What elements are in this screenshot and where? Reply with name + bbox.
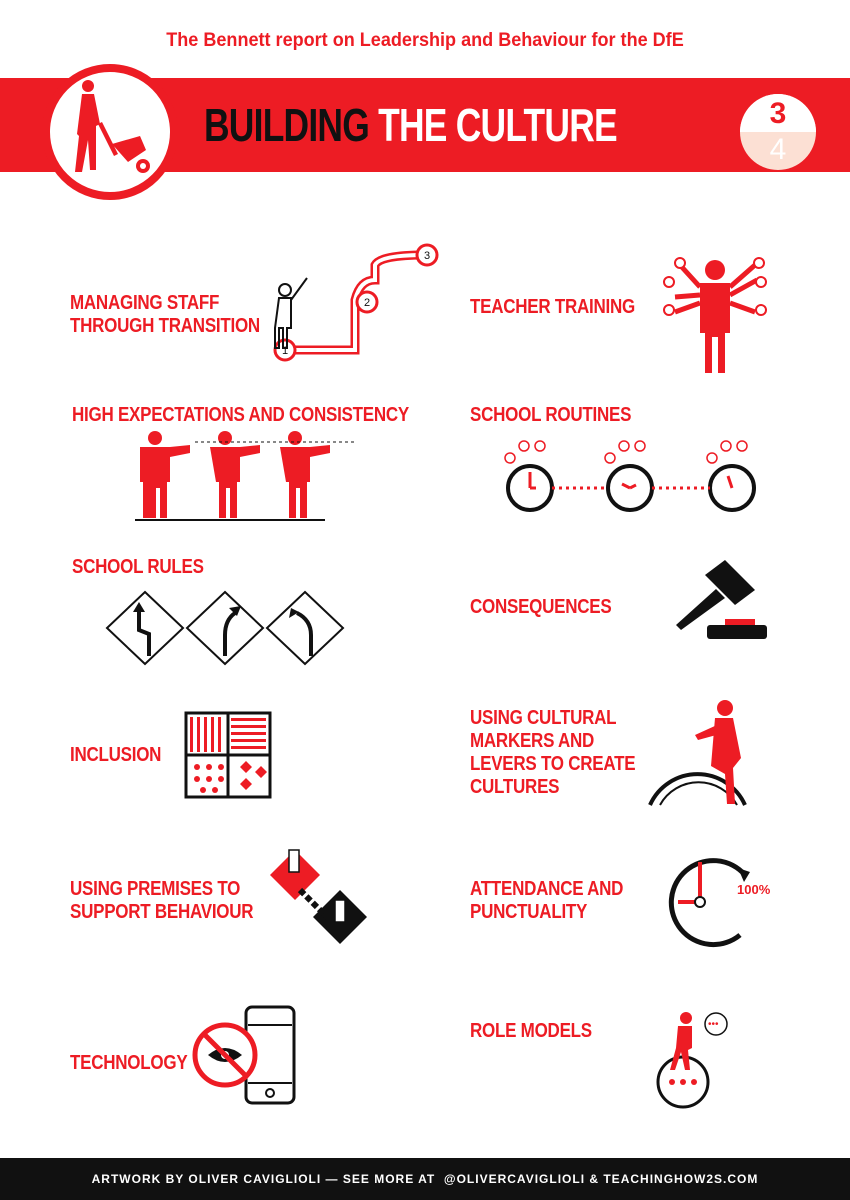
icon: premises xyxy=(270,849,367,944)
label: managing staff xyxy=(70,292,260,337)
label: attendance: ATTENDANCE AND xyxy=(470,878,623,900)
icon: three figures xyxy=(135,431,354,521)
label: inclusion: INCLUSION xyxy=(70,744,161,766)
subtitle: The Bennett report on Leadership and Behaviour for the DfE xyxy=(166,30,684,51)
footer: ARTWORK BY OLIVER CAVIGLIOLI — SEE MORE AT @OLIVERCAVIGLIOLI & TEACHINGHOW2S.COM xyxy=(92,1172,758,1186)
label: premises: USING PREMISES TO xyxy=(70,878,240,900)
icon: transition path xyxy=(274,244,438,362)
icon: role model: ••• xyxy=(708,1019,719,1030)
icon: gavel xyxy=(676,560,767,639)
label: consequences: CONSEQUENCES xyxy=(470,596,611,618)
icon: transition path: 3 xyxy=(424,250,430,262)
label: attendance xyxy=(470,878,623,923)
title: BUILDING THE CULTURE xyxy=(204,99,617,151)
icon: clocks xyxy=(504,440,756,512)
icon: phone with eye xyxy=(192,1006,296,1104)
label: school rules: SCHOOL RULES xyxy=(72,556,204,578)
label: cultural markers: MARKERS AND xyxy=(470,730,594,752)
label: premises xyxy=(70,878,254,923)
label: cultural markers: LEVERS TO CREATE xyxy=(470,753,635,775)
icon: role model xyxy=(656,1012,728,1108)
label: high expectations: HIGH EXPECTATIONS AND CONSISTENCY xyxy=(72,404,409,426)
icon: teacher training figure xyxy=(663,257,767,373)
icon: clock 100% xyxy=(668,858,771,948)
icon: transition path: 2 xyxy=(364,297,370,309)
label: attendance: PUNCTUALITY xyxy=(470,901,587,923)
label: cultural markers: CULTURES xyxy=(470,776,559,798)
label: managing staff: THROUGH TRANSITION xyxy=(70,315,260,337)
label: managing staff: MANAGING STAFF xyxy=(70,292,219,314)
label: teacher training: TEACHER TRAINING xyxy=(470,296,635,318)
label: role models: ROLE MODELS xyxy=(470,1020,592,1042)
icon: transition path: 1 xyxy=(282,345,288,357)
page badge 3/4 xyxy=(740,94,816,170)
icon: road signs xyxy=(106,590,344,666)
icon: wheelbarrow badge xyxy=(50,64,170,200)
label: school routines: SCHOOL ROUTINES xyxy=(470,404,631,426)
label: technology: TECHNOLOGY xyxy=(70,1052,187,1074)
icon: clock 100%: 100% xyxy=(737,882,771,897)
label: premises: SUPPORT BEHAVIOUR xyxy=(70,901,253,923)
label: cultural markers: USING CULTURAL xyxy=(470,707,616,729)
icon: figure pushing wheel xyxy=(648,700,747,806)
header band xyxy=(0,78,850,172)
page badge 3/4: 3 xyxy=(770,97,786,130)
icon: puzzle xyxy=(184,712,272,798)
page badge 3/4: 4 xyxy=(770,133,786,166)
footer xyxy=(0,1158,850,1200)
label: cultural markers xyxy=(470,707,635,798)
